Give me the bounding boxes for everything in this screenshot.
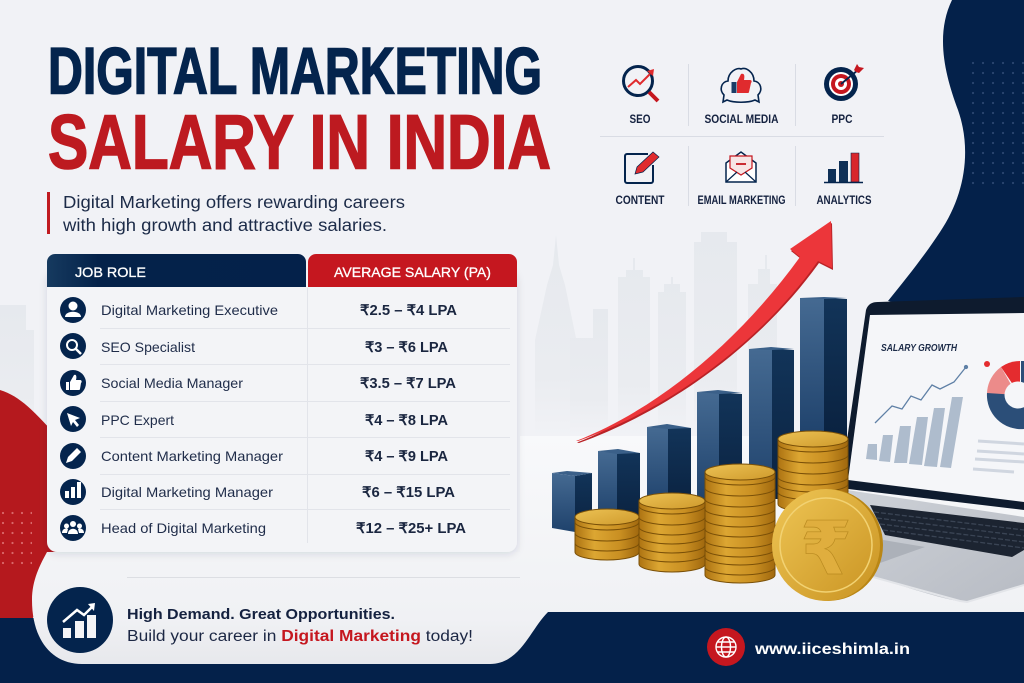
icon: content [616,152,664,207]
row: Head of Digital Marketing [60,515,467,541]
row: Head of Digital Marketing: ₹12 – ₹25+ LPA [356,521,467,537]
dot grid top right [968,55,1024,190]
footer message: High Demand. Great Opportunities. [127,606,395,623]
row: Digital Marketing Manager: Digital Marketing Manager [101,484,273,500]
icon: email [698,152,786,207]
icon: PPC target: PPC [832,114,852,126]
row: Digital Marketing Manager: ₹6 – ₹15 LPA [362,485,456,501]
screen line chart [875,366,968,423]
big rupee coin: ₹ [800,506,852,592]
row: Content Marketing Manager [60,443,449,469]
row: Content Marketing Manager: ₹4 – ₹9 LPA [365,449,449,465]
row: Digital Marketing Executive: Digital Marketing Executive [101,302,278,318]
icon: analytics [816,153,872,207]
big rupee coin [772,489,883,601]
row: Social Media Manager: Social Media Manager [101,375,243,391]
row: SEO Specialist: ₹3 – ₹6 LPA [365,340,449,356]
navy footer band [0,612,1024,683]
icon: PPC target [824,64,864,126]
subtitle: with high growth and attractive salaries. [62,215,387,235]
footer message: Build your career in Digital Marketing today! [127,628,473,645]
title [48,34,551,186]
floor [520,436,1024,616]
laptop screen [840,297,1024,510]
footer message [47,587,473,653]
table header: job role [47,254,306,287]
growth arrow [576,221,833,443]
salary table [47,254,517,552]
touchpad [880,540,925,563]
3D bar chart [552,297,847,532]
row: Content Marketing Manager: Content Marketing Manager [101,448,283,464]
row: Head of Digital Marketing: Head of Digital Marketing [101,520,266,536]
channels grid [600,64,884,207]
icon: SEO [624,66,658,126]
icon: social media: SOCIAL MEDIA [704,114,778,126]
table header: salary: AVERAGE SALARY (PA) [334,264,491,280]
row: Social Media Manager [60,370,457,396]
icon: content: CONTENT [616,195,664,207]
icon: SEO: SEO [630,114,651,126]
title: DIGITAL MARKETING [48,34,542,108]
row: SEO Specialist: SEO Specialist [101,339,195,355]
row: PPC Expert [60,406,449,432]
row: PPC Expert: ₹4 – ₹8 LPA [365,413,449,429]
title: SALARY IN INDIA [48,100,551,186]
row: PPC Expert: PPC Expert [101,412,174,428]
coin stacks [575,431,848,583]
icon: globe [707,628,745,666]
keyboard [870,505,1024,557]
icon: social media [704,69,778,126]
skyline backdrop [0,232,777,436]
subtitle: Digital Marketing offers rewarding careers [63,192,405,212]
laptop [840,297,1024,602]
footer divider [127,576,520,578]
subtitle [47,192,405,235]
screen bars [866,397,963,468]
icon: analytics: ANALYTICS [816,195,872,207]
row: Social Media Manager: ₹3.5 – ₹7 LPA [360,376,457,392]
navy blob top right [888,0,1024,330]
dot grid bottom left [0,505,32,570]
row: Digital Marketing Executive [60,297,458,323]
row: SEO Specialist [60,333,449,359]
table header: salary [308,254,517,287]
laptop base [847,490,1024,602]
icon: growth chart [47,587,113,653]
table header: job role: JOB ROLE [75,264,146,280]
donut chart [984,361,1024,429]
row: Digital Marketing Manager [60,479,456,505]
red blob bottom left [0,390,60,625]
website [707,628,910,666]
icon: email: EMAIL MARKETING [698,195,786,207]
website: www.iiceshimla.in [754,641,910,658]
screen title: SALARY GROWTH [881,342,957,354]
row: Digital Marketing Executive: ₹2.5 – ₹4 LPA [360,303,458,319]
footer panel [32,552,548,664]
